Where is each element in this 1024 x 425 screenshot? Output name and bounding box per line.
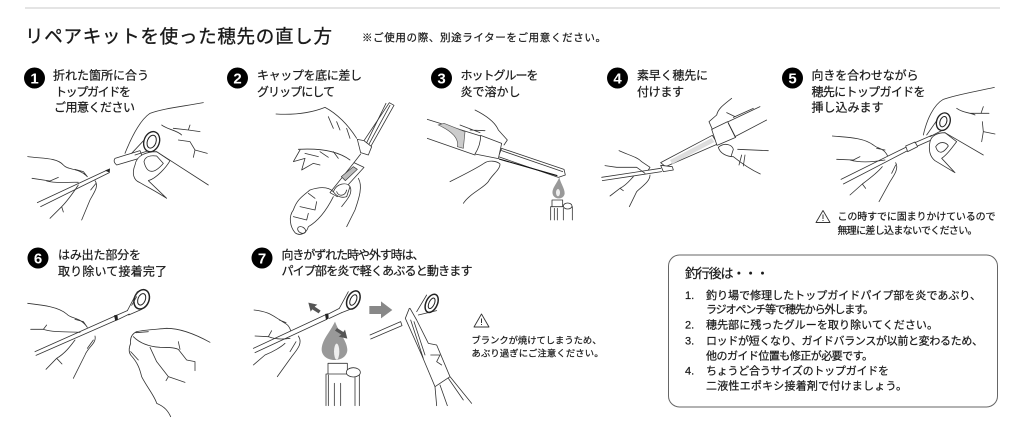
step 3 number: 3 bbox=[437, 70, 446, 88]
step 4 text bbox=[637, 68, 708, 99]
panel list: 他のガイド位置も修正が必要です。 bbox=[706, 348, 873, 362]
step 4 number bbox=[607, 68, 628, 88]
step 1 illustration: broken tip and top guide bbox=[28, 103, 208, 220]
step 1 bbox=[24, 68, 208, 220]
step 7 number bbox=[252, 248, 272, 268]
panel list: ラジオペンチ等で穂先から外します。 bbox=[706, 302, 874, 316]
panel list bbox=[685, 288, 983, 392]
step 4 bbox=[602, 68, 768, 207]
step 2 number bbox=[227, 68, 248, 88]
step 5 text: 穂先にトップガイドを bbox=[812, 85, 926, 99]
title: リペアキットを使った穂先の直し方 bbox=[25, 26, 332, 47]
panel list: 穂先部に残ったグルーを取り除いてください。 bbox=[706, 318, 938, 332]
grey arrow bbox=[369, 301, 392, 318]
step 3 number bbox=[431, 68, 452, 88]
step 7 illustration: flame and pliers bbox=[253, 289, 472, 406]
note: lighter required: ※ご使用の際、別途ライターをご用意ください。 bbox=[362, 31, 606, 44]
step 4 text: 付けます bbox=[637, 85, 684, 99]
step 1 text bbox=[53, 68, 149, 114]
step 7 bbox=[252, 247, 604, 406]
step 5 number bbox=[782, 68, 803, 88]
step 3 text bbox=[460, 68, 538, 99]
pliers bbox=[405, 308, 472, 406]
step 1 text: 折れた箇所に合う bbox=[53, 68, 149, 82]
panel heading: 釣行後は・・・ bbox=[685, 266, 769, 281]
step 5 bbox=[782, 68, 996, 237]
step 6 bbox=[28, 248, 210, 417]
step 7 number: 7 bbox=[258, 250, 266, 268]
panel list: 3. bbox=[685, 336, 694, 348]
step 6 text bbox=[58, 248, 167, 278]
step 3 illustration: melting glue over lighter bbox=[427, 110, 572, 220]
warning icon bbox=[816, 210, 830, 222]
step 6 illustration: removing excess glue bbox=[28, 287, 210, 417]
step 1 number: 1 bbox=[30, 70, 39, 88]
panel list: ちょうど合うサイズのトップガイドを bbox=[706, 364, 889, 378]
step 1 text: トップガイドを bbox=[55, 85, 131, 99]
panel: after fishing bbox=[668, 255, 998, 407]
step 5 text bbox=[812, 68, 926, 114]
step 2 text: キャップを底に差し bbox=[257, 68, 362, 82]
warning text: 無理に差し込まないでください。 bbox=[838, 224, 978, 237]
step 1 number bbox=[24, 68, 45, 88]
panel list: 2. bbox=[685, 320, 694, 332]
step 2 bbox=[227, 68, 394, 235]
arrow: move down bbox=[335, 328, 347, 339]
step 5 text: 向きを合わせながら bbox=[812, 68, 918, 82]
step 3 text: 炎で溶かし bbox=[460, 85, 520, 99]
panel list: 1. bbox=[685, 290, 694, 302]
step 2 text bbox=[257, 68, 362, 99]
step 4 number: 4 bbox=[613, 70, 622, 88]
step 5 warning bbox=[816, 210, 996, 237]
warning text: この時すでに固まりかけているので bbox=[838, 211, 996, 223]
step 7 text bbox=[282, 247, 472, 278]
step 4 illustration: attaching glue to rod tip bbox=[602, 98, 768, 207]
step 6 number: 6 bbox=[34, 250, 42, 268]
step 6 text: はみ出た部分を bbox=[58, 248, 141, 262]
warning text bbox=[472, 334, 604, 358]
arrow: move up bbox=[308, 303, 321, 313]
step 2 number: 2 bbox=[233, 70, 242, 88]
step 5 text: 挿し込みます bbox=[812, 100, 884, 114]
step 7 text: パイプ部を炎で軽くあぶると動きます bbox=[282, 264, 472, 278]
step 6 number bbox=[28, 248, 48, 268]
panel list: 二液性エポキシ接着剤で付けましょう。 bbox=[706, 378, 907, 392]
flame bbox=[322, 322, 347, 360]
panel list: ロッドが短くなり、ガイドバランスが以前と変わるため、 bbox=[706, 334, 983, 348]
lighter bbox=[326, 363, 359, 406]
step 7 text: 向きがずれた時や外す時は、 bbox=[282, 247, 424, 262]
step 5 illustration: inserting top guide bbox=[832, 87, 995, 202]
step 3 text: ホットグルーを bbox=[460, 68, 538, 82]
warning text: あぶり過ぎにご注意ください。 bbox=[472, 348, 604, 358]
step 6 text: 取り除いて接着完了 bbox=[58, 264, 167, 278]
step 1 text: ご用意ください bbox=[54, 100, 135, 114]
removed pipe bbox=[370, 322, 402, 339]
step 3 bbox=[427, 68, 572, 220]
step 2 text: グリップにして bbox=[257, 85, 335, 99]
warning icon bbox=[474, 314, 489, 327]
panel list: 4. bbox=[685, 366, 694, 378]
step 2 illustration: hands forming the grip bbox=[276, 103, 394, 235]
warning text bbox=[838, 211, 996, 237]
step 5 number: 5 bbox=[788, 70, 797, 88]
step 7 warning bbox=[472, 314, 604, 358]
warning text: ブランクが焼けてしまうため、 bbox=[472, 334, 602, 346]
panel list: 釣り場で修理したトップガイドパイプ部を炎であぶり、 bbox=[706, 288, 981, 302]
step 4 text: 素早く穂先に bbox=[637, 68, 708, 82]
